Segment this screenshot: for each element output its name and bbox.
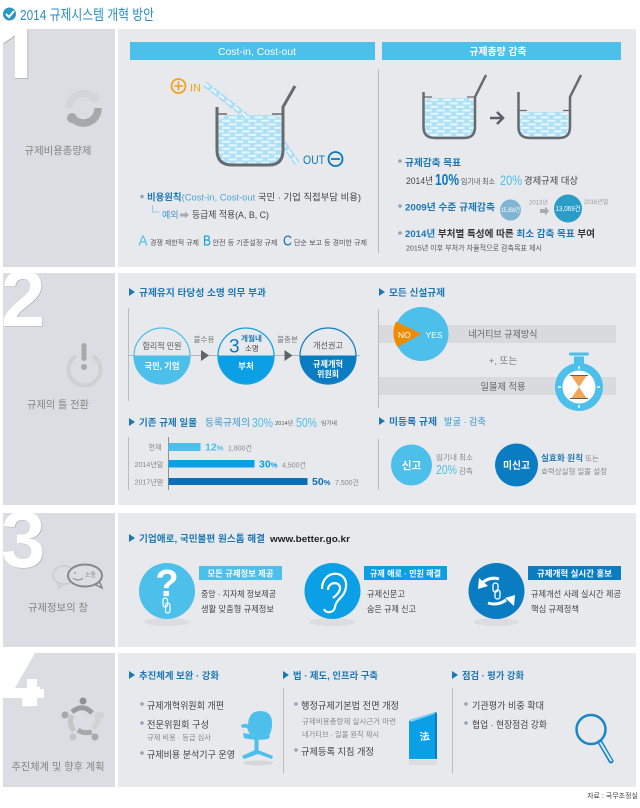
- label: 규제의 틀 전환: [27, 399, 89, 411]
- box: real-time promotion: 핵심 규제정책: [531, 604, 579, 614]
- column: law and infrastructure: 법 · 제도, 인프라 구축: [293, 670, 378, 682]
- panel: section 2 label: [1, 254, 115, 505]
- box: all regulation info: 중앙 · 지자체 정보제공: [201, 589, 276, 599]
- text: 2009 level and counts: 15,269건: [501, 206, 520, 214]
- numeral 1: [3, 29, 28, 79]
- icon: plus in: [172, 79, 201, 94]
- icon: question circle: ?: [155, 563, 179, 605]
- bar: end of 2014: 30%: [259, 458, 278, 470]
- label: 규제정보의 창: [28, 602, 88, 614]
- legend: A B C grades: B: [203, 232, 211, 250]
- pie: yes no: NO: [398, 330, 411, 340]
- text: reduction target: 2014년: [406, 176, 433, 187]
- flow: committee: 위원회: [317, 369, 339, 379]
- text: reduction target: 20%: [500, 172, 522, 188]
- panel: section 1 content: [118, 29, 636, 267]
- flow: committee: 규제개혁: [313, 359, 343, 369]
- bar: end of 2014: 2014년말: [134, 460, 164, 469]
- icon: arrows circle: [468, 563, 524, 626]
- icon: people ring: [62, 698, 104, 740]
- heading: one-stop: [129, 533, 350, 545]
- numeral 2: 2: [2, 255, 46, 344]
- column: governance: 전문위원회 구성: [147, 719, 209, 731]
- callout: unreported: 미신고: [503, 459, 530, 472]
- column: governance: 규제개혁위원회 개편: [147, 700, 224, 712]
- column: law and infrastructure: [283, 670, 399, 758]
- box: real-time promotion: [528, 566, 621, 614]
- text: cost principle: 예외: [162, 209, 179, 220]
- pie: yes no: [393, 307, 448, 361]
- text: 2009 level and counts: 2016년말: [584, 198, 609, 206]
- band: negative regulation: 네거티브 규제방식: [468, 330, 538, 340]
- icon: plus in: IN: [190, 82, 201, 94]
- column: law and infrastructure: 행정규제기본법 전면 개정: [301, 700, 399, 712]
- icon: law book: 法: [419, 730, 430, 744]
- legend: A B C grades: [138, 232, 367, 250]
- header: total reduction: 규제총량 감축: [470, 45, 526, 58]
- text: 2009 level and counts: 2009년 수준 규제감축: [405, 202, 495, 214]
- bar chart: sunset share: [128, 437, 359, 490]
- flow arrow: insufficient: [277, 335, 298, 361]
- band: sunset applied: [379, 377, 616, 395]
- panel: section 2 content: [118, 273, 636, 505]
- flow arrow: not accepted: 불수용: [194, 335, 214, 344]
- flow: citizens: [134, 328, 190, 384]
- heading: all new regulations: 모든 신설규제: [389, 287, 445, 299]
- icon: magnifier: [576, 715, 611, 761]
- numeral 2: [4, 273, 43, 326]
- column: evaluation: 기관평가 비중 확대: [472, 700, 544, 712]
- text: cost principle: 비용원칙(Cost-in, Cost-out 국민 · 기업 직접부담 비용): [147, 192, 361, 204]
- heading: one-stop: www.better.go.kr: [269, 534, 350, 545]
- flow arrow: not accepted: [194, 335, 214, 361]
- heading: sunset of existing regulations: 임기내: [321, 419, 337, 427]
- bar: now: [149, 442, 252, 454]
- text: reduction target: 규제감축 목표: [405, 157, 461, 169]
- title: 2014 규제시스템 개혁 방안: [20, 7, 154, 24]
- flow: ministries: 소명: [245, 343, 259, 353]
- icon: minus out: [303, 152, 342, 167]
- header: total reduction: [382, 42, 621, 60]
- text: reduction target: 10%: [435, 172, 459, 189]
- bucket with chains: [205, 84, 297, 165]
- flow: ministries: 개월내: [241, 333, 262, 343]
- text: 2009 level and counts: 2013년: [529, 198, 548, 206]
- panel: section 4 label: [3, 653, 115, 787]
- box: real-time promotion: 규제개혁 실시간 홍보: [537, 568, 612, 578]
- heading: unregistered regulations: [379, 416, 486, 428]
- bar: end of 2017: 7,500건: [335, 478, 359, 487]
- heading: sunset of existing regulations: 기존 규제 일몰: [139, 417, 197, 429]
- text: 2014 department targets: [398, 228, 595, 252]
- bar: now: 현재: [149, 444, 161, 452]
- flow: ministries: 3: [229, 336, 240, 358]
- flow: citizens: 합리적 민원: [142, 341, 182, 351]
- heading: unregistered regulations: 미등록 규제: [389, 416, 437, 428]
- box: difficulty and complaints: [364, 566, 447, 614]
- icon: chat bubbles: 소통: [85, 572, 97, 579]
- numeral 3: 3: [1, 495, 46, 584]
- text: cost principle: [140, 192, 361, 221]
- numeral 4: [3, 653, 44, 706]
- callout: reported: [391, 444, 473, 486]
- column: governance: 규제비용 분석기구 운영: [147, 750, 235, 761]
- text: cost principle: 등급제 적용(A, B, C): [192, 209, 269, 221]
- bar: now: 12%: [205, 442, 224, 454]
- numeral 3: [3, 513, 44, 568]
- icon: minus out: OUT: [303, 153, 326, 167]
- flow: committee: 개선권고: [313, 340, 343, 350]
- box: all regulation info: 생활 맞춤형 규제정보: [201, 604, 274, 614]
- text: or: +, 또는: [489, 356, 517, 367]
- icon: chair: [241, 711, 273, 766]
- callout: unreported: 또는: [585, 454, 599, 463]
- panel: section 3 content: [118, 513, 636, 647]
- callout: reported: 20%: [436, 462, 457, 477]
- callout: unreported: 실효화 원칙: [541, 453, 583, 463]
- column: evaluation: [452, 670, 547, 731]
- header: cost-in cost-out: [130, 42, 375, 60]
- heading: unregistered regulations: 발굴 · 감축: [444, 416, 486, 428]
- bar: end of 2017: 2017년말: [134, 478, 164, 486]
- flow arrow: insufficient: 불충분: [277, 335, 298, 344]
- callout: reported: 감축: [459, 466, 473, 476]
- bucket: after reduction: [518, 75, 581, 139]
- icon: law book: [409, 712, 437, 765]
- legend: A B C grades: A: [138, 232, 148, 250]
- text: reduction target: [398, 157, 578, 189]
- heading: one-stop: 기업애로, 국민불편 원스톱 해결: [139, 533, 265, 545]
- column: law and infrastructure: 규제비용총량제 실시근거 마련: [302, 716, 396, 726]
- header: cost-in cost-out: Cost-in, Cost-out: [218, 47, 296, 58]
- arrow: [490, 112, 503, 124]
- icon: power: [68, 343, 100, 386]
- flow: citizens: 국민, 기업: [144, 361, 180, 371]
- text: 2009 level and counts: [398, 194, 609, 222]
- legend: A B C grades: 안전 등 기준설정 규제: [212, 238, 278, 247]
- heading: sunset of existing regulations: 2014년: [275, 419, 293, 427]
- panel: section 3 label: [3, 513, 115, 647]
- column: governance: 규제 비용 · 등급 심사: [147, 732, 211, 742]
- box: all regulation info: [199, 566, 282, 614]
- bar: end of 2017: 50%: [312, 476, 331, 488]
- box: real-time promotion: 규제개선 사례 실시간 제공: [531, 589, 621, 599]
- heading: justification: 규제유지 타당성 소명 의무 부과: [139, 287, 266, 299]
- box: all regulation info: 모든 규제정보 제공: [208, 568, 274, 578]
- panel: section 1 label: [3, 29, 115, 267]
- pie: yes no: YES: [426, 330, 443, 340]
- callout: unreported: [495, 444, 607, 486]
- icon: chat bubbles: [53, 564, 102, 588]
- column: governance: 추진체계 보완 · 강화: [139, 670, 219, 682]
- icon: cost cycle: [67, 93, 99, 123]
- numeral 3: 3: [2, 496, 46, 585]
- flow: ministries: [218, 328, 274, 384]
- column: evaluation: 점검 · 평가 강화: [462, 670, 524, 682]
- icon: question circle: [139, 563, 195, 626]
- heading: sunset of existing regulations: [129, 415, 337, 430]
- bar: end of 2014: [134, 458, 306, 470]
- source: 자료 : 국무조정실: [587, 791, 638, 800]
- band: sunset applied: 일몰제 적용: [480, 381, 526, 393]
- column: evaluation: 협업 · 현장점검 강화: [472, 719, 547, 731]
- text: 2009 level and counts: 13,069건: [556, 204, 580, 213]
- text: 2014 department targets: 2014년 부처별 특성에 따른 최소 감축 목표 부여: [405, 228, 595, 240]
- box: difficulty and complaints: 규제신문고: [367, 589, 405, 599]
- label: 규제비용총량제: [24, 145, 92, 157]
- heading: sunset of existing regulations: 30%: [252, 415, 273, 430]
- bar: end of 2014: 4,500건: [282, 460, 306, 470]
- column: governance: [129, 670, 235, 761]
- flow: ministries: 부처: [238, 361, 254, 371]
- panel: section 4 content: [118, 653, 636, 787]
- label: 추진체계 및 향후 계획: [12, 761, 104, 773]
- text: reduction target: 임기내 최소: [461, 176, 495, 186]
- flow: committee: [300, 328, 356, 384]
- heading: sunset of existing regulations: 50%: [296, 415, 317, 430]
- icon: stopwatch: [555, 352, 603, 411]
- callout: reported: 임기내 최소: [436, 452, 473, 462]
- box: difficulty and complaints: 규제 애로 · 민원 해결: [370, 568, 441, 578]
- numeral 2: 2: [1, 254, 46, 343]
- legend: A B C grades: C: [283, 232, 292, 250]
- column: law and infrastructure: 네거티브 · 일몰 원칙 제시: [302, 730, 379, 739]
- bucket: before reduction: [424, 75, 486, 139]
- bar: now: 1,800건: [228, 444, 252, 452]
- icon: ear circle: [304, 563, 360, 626]
- callout: unreported: 효력상실형 일몰 설정: [541, 466, 607, 476]
- legend: A B C grades: 단순 보고 등 경미한 규제: [294, 238, 367, 247]
- callout: reported: 신고: [402, 459, 421, 472]
- box: difficulty and complaints: 숨은 규제 신고: [367, 604, 416, 614]
- bar: end of 2017: [134, 476, 359, 488]
- text: reduction target: 경제규제 대상: [524, 175, 578, 187]
- text: 2014 department targets: 2015년 이후 부처가 자율적으로 감축목표 제시: [406, 242, 542, 252]
- heading: sunset of existing regulations: 등록규제의: [205, 417, 250, 429]
- column: law and infrastructure: 규제등록 지침 개정: [301, 747, 374, 758]
- band: negative regulation: [379, 325, 616, 343]
- legend: A B C grades: 경쟁 제한적 규제: [150, 238, 199, 247]
